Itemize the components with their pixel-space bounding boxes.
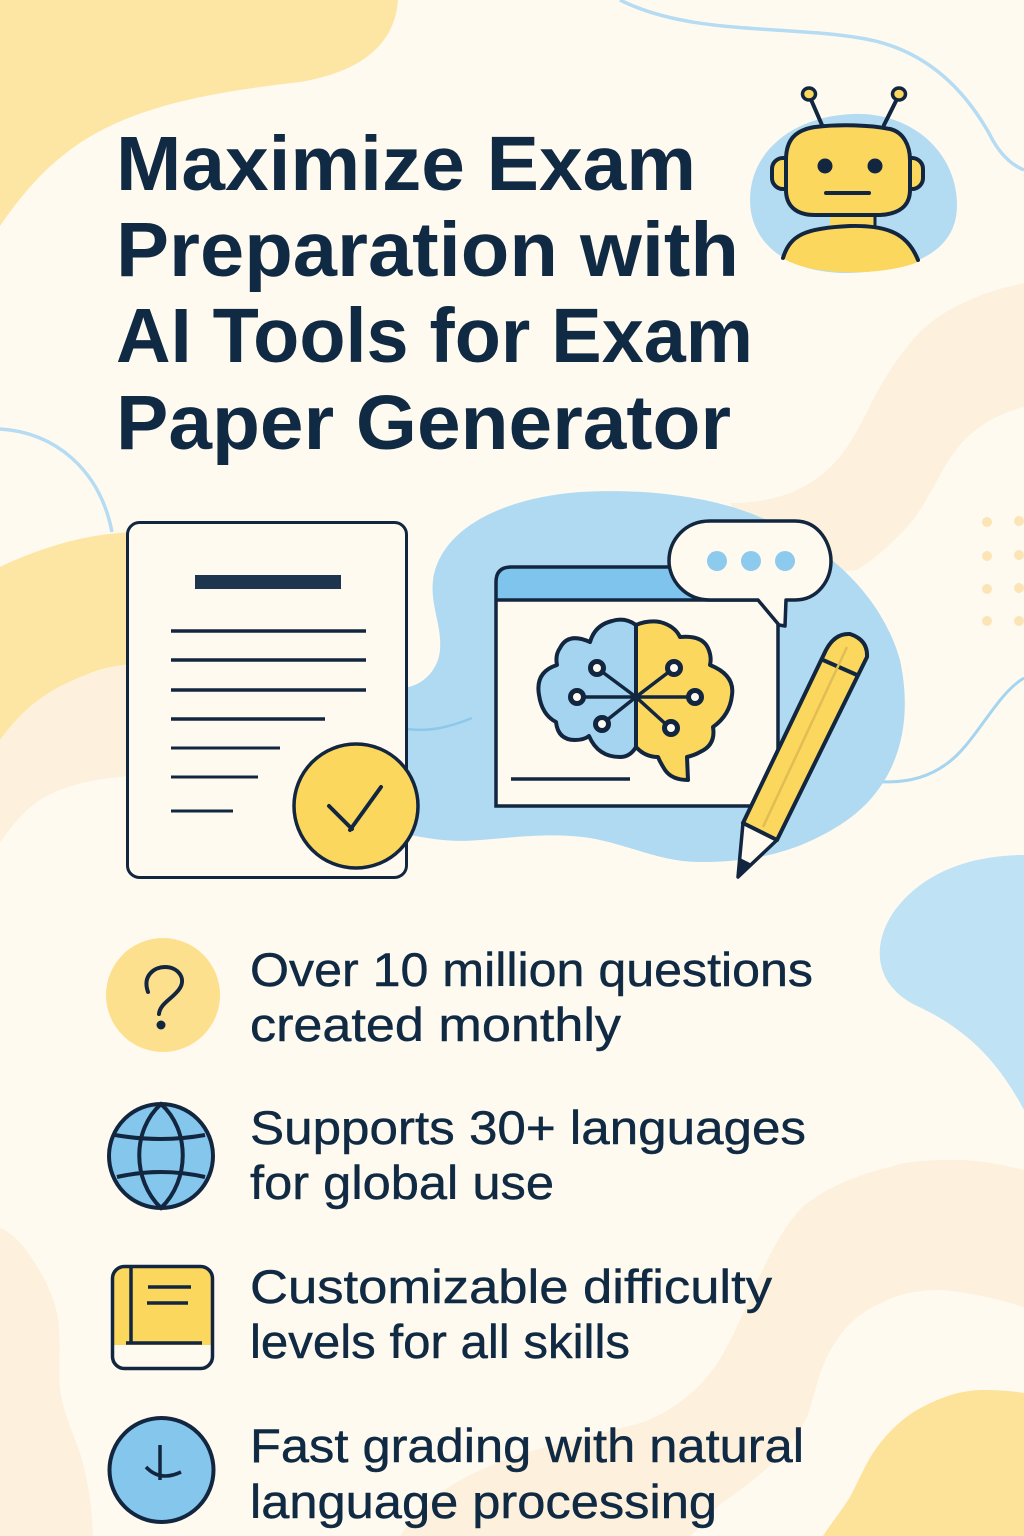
fact: grading bbox=[110, 1418, 804, 1528]
illustration blue blob bbox=[400, 491, 905, 862]
fact: languages: for global use bbox=[250, 1156, 554, 1209]
icon: globe bbox=[109, 1104, 213, 1208]
fact: difficulty bbox=[112, 1260, 773, 1368]
icon: robot bbox=[750, 88, 957, 273]
browser window bbox=[496, 521, 831, 806]
fact: questions: Over 10 million questions bbox=[250, 943, 813, 996]
title: Preparation with bbox=[116, 207, 739, 293]
speech bubble bbox=[669, 521, 831, 626]
check badge bbox=[294, 744, 418, 868]
fact: grading: language processing bbox=[250, 1475, 717, 1528]
title: Maximize Exam bbox=[116, 121, 696, 207]
icon: clock bbox=[110, 1418, 214, 1522]
fact: difficulty: Customizable difficulty bbox=[250, 1260, 773, 1313]
fact: difficulty: levels for all skills bbox=[250, 1315, 630, 1368]
title: Paper Generator bbox=[116, 380, 731, 466]
document bbox=[128, 522, 418, 878]
fact: questions bbox=[106, 938, 813, 1052]
title bbox=[116, 121, 753, 466]
fact: grading: Fast grading with natural bbox=[250, 1419, 804, 1472]
icon: book bbox=[112, 1266, 212, 1368]
document title bar bbox=[195, 575, 341, 589]
title: AI Tools for Exam bbox=[116, 293, 753, 379]
fact: languages bbox=[109, 1101, 806, 1209]
icon: pencil bbox=[738, 634, 867, 877]
icon: question mark bbox=[106, 938, 220, 1052]
fact: languages: Supports 30+ languages bbox=[250, 1101, 806, 1154]
fact: questions: created monthly bbox=[250, 998, 622, 1051]
icon: brain bbox=[538, 620, 732, 780]
